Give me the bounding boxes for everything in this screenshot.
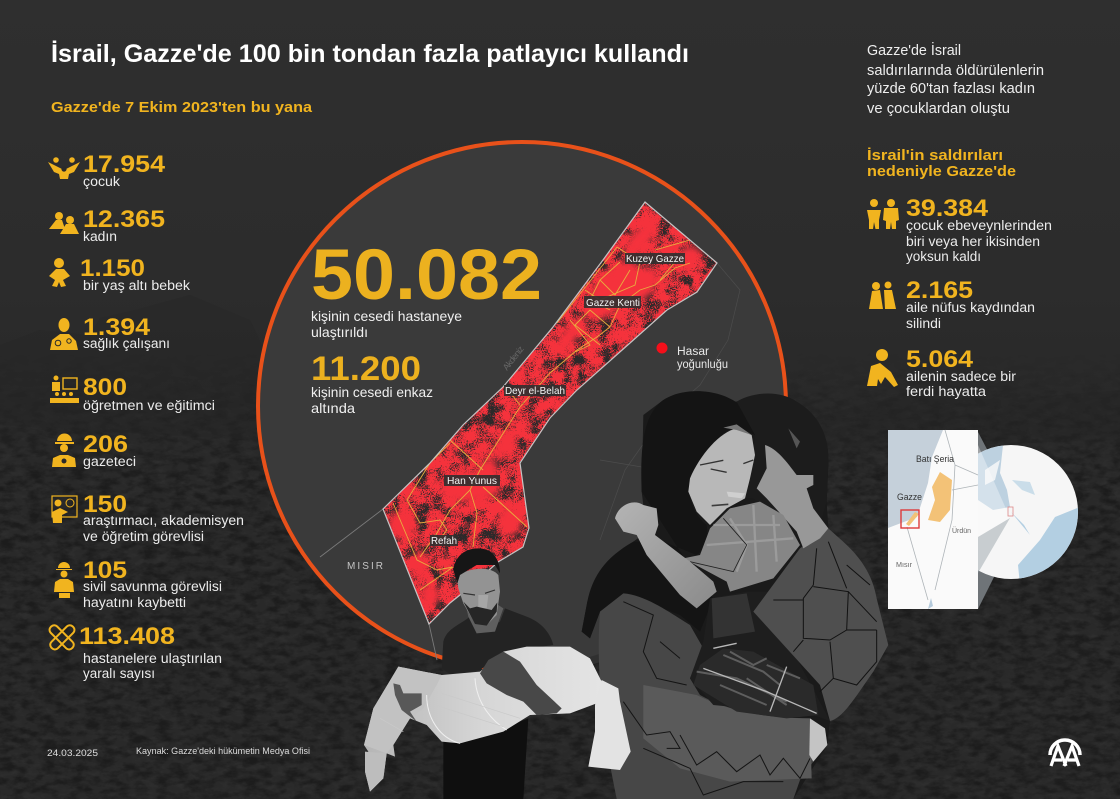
stat: health workers: sağlık çalışanı (83, 336, 170, 351)
border lines outside the strip (320, 509, 437, 660)
map labels: MISIR (347, 561, 383, 572)
text block: women and children share: ve çocuklardan oluştu (867, 101, 1010, 117)
panel: right family stats (867, 195, 1052, 399)
headline number: 50.082: ulaştırıldı (311, 324, 368, 340)
stat: women: 12.365 (83, 206, 165, 233)
roads (393, 240, 690, 590)
ribbon (588, 680, 631, 770)
map labels: Deyr el-Belah (505, 385, 565, 397)
stat: orphaned children: çocuk ebeveynlerinden (906, 218, 1052, 233)
child hair (737, 394, 829, 525)
stat: orphaned children: biri veya her ikisinden (906, 234, 1040, 249)
stat: teachers: 800 (83, 374, 127, 401)
stat: academics: 150 (83, 491, 127, 518)
stat: children: çocuk (83, 174, 120, 189)
silhouette base (582, 400, 888, 799)
text block: women and children share: yüzde 60'tan fazlası kadın (867, 81, 1035, 97)
stat: sole survivor: ailenin sadece bir (906, 369, 1017, 384)
stat: academics (52, 491, 244, 544)
stat: infants: bir yaş altı bebek (83, 278, 190, 293)
map: Gaza Strip damage density (380, 200, 720, 625)
jacket body (599, 593, 827, 799)
beard (463, 602, 497, 626)
text block: women and children share: saldırılarında öldürülenlerin (867, 63, 1044, 79)
stat: children: 17.954 (83, 151, 165, 178)
panel: left casualty stats (48, 151, 244, 681)
map labels: Refah (431, 535, 457, 547)
stat: infants (49, 255, 190, 293)
panel: map circle (258, 142, 786, 670)
stat: women: kadın (83, 229, 117, 244)
scarf and shoulder (582, 391, 755, 638)
stat: wounded: hastanelere ulaştırılan (83, 651, 222, 666)
forearm sleeve (643, 685, 812, 782)
neck (465, 602, 503, 633)
locator: inset map: Batı Şeria (916, 454, 955, 465)
legend: damage density (656, 342, 728, 371)
headline number: 11.200: kişinin cesedi enkaz (311, 384, 433, 400)
date: 24.03.2025 (47, 748, 98, 759)
stat: erased families: 2.165 (906, 277, 973, 304)
photo: man carrying shrouded child (364, 548, 631, 799)
child's plaid trousers (693, 643, 818, 718)
stat: orphaned children: 39.384 (906, 195, 988, 222)
stat: health workers: 1.394 (83, 314, 150, 341)
stat: orphaned children (867, 195, 1052, 264)
stat: civil defence: hayatını kaybetti (83, 595, 186, 610)
locator: inset map (888, 430, 978, 609)
title: İsrail, Gazze'de 100 bin tondan fazla patlayıcı kullandı (51, 40, 689, 68)
right sleeve (753, 528, 888, 721)
map labels: Han Yunus (447, 475, 497, 487)
faint surrounding roads and borders (600, 263, 740, 540)
headline number: 50.082: 50.082 (311, 236, 542, 315)
stat: academics: araştırmacı, akademisyen (83, 513, 244, 528)
trousers (443, 718, 528, 799)
heading: due to Israeli attacks (867, 147, 1016, 180)
stat: wounded: 113.408 (79, 623, 175, 650)
child's shirt (683, 502, 800, 592)
stat: infants: 1.150 (80, 255, 145, 282)
background: rubble photo (0, 429, 1120, 799)
stat: teachers (50, 374, 215, 413)
child's arm (615, 502, 717, 608)
stat: orphaned children: yoksun kaldı (906, 249, 981, 264)
stat: wounded (48, 623, 222, 681)
map labels: Gazze Kenti (586, 297, 640, 309)
headline number: 11.200 (311, 350, 433, 416)
stat: journalists: gazeteci (83, 454, 136, 469)
stat: civil defence: 105 (83, 557, 127, 584)
map labels (347, 253, 685, 572)
t-shirt (442, 608, 553, 677)
stat: civil defence (54, 557, 222, 610)
photo: mother holding child (582, 391, 888, 799)
hair (453, 548, 500, 583)
heading: due to Israeli attacks: nedeniyle Gazze'de (867, 163, 1016, 180)
legend: damage density: Hasar (677, 346, 709, 358)
face (457, 569, 500, 625)
stat: sole survivor: ferdi hayatta (906, 384, 987, 399)
stat: health workers (50, 314, 170, 351)
mother's face (688, 428, 755, 525)
stat: teachers: öğretmen ve eğitimci (83, 398, 215, 413)
stat: children (48, 151, 165, 189)
stat: wounded: yaralı sayısı (83, 666, 155, 681)
left hand (393, 683, 422, 722)
text block: women and children share (867, 41, 1044, 117)
right arm (480, 652, 562, 715)
stat: journalists: 206 (83, 431, 128, 458)
stat: civil defence: sivil savunma görevlisi (83, 579, 222, 594)
jacket pattern (623, 602, 810, 795)
map labels: Kuzey Gazze (626, 253, 684, 265)
stat: erased families: aile nüfus kaydından (906, 300, 1035, 315)
stat: erased families: silindi (906, 316, 941, 331)
stat: women (49, 206, 165, 244)
map labels: Akdeniz (501, 344, 526, 372)
locator: inset map: Ürdün (952, 527, 971, 535)
source: Kaynak: Gazze'deki hükümetin Medya Ofisi (136, 746, 310, 757)
locator: inset map: Gazze (897, 492, 922, 503)
stat: academics: ve öğretim görevlisi (83, 529, 204, 544)
patch hiding the ring between the two figures (584, 656, 606, 663)
headline number: 50.082: kişinin cesedi hastaneye (311, 308, 462, 324)
stat: erased families (869, 277, 1035, 331)
logo: AA (1050, 740, 1080, 766)
locator: inset map: Mısır (896, 562, 913, 569)
locator: globe (978, 432, 1078, 609)
stat: sole survivor (867, 346, 1017, 399)
legend: damage density: yoğunluğu (677, 359, 728, 371)
stat: journalists (52, 431, 136, 469)
shroud (364, 647, 602, 792)
mother's hand (757, 445, 828, 548)
heading: due to Israeli attacks: İsrail'in saldırıları (867, 147, 1003, 164)
headline number: 11.200: altında (311, 400, 355, 416)
child's torso (690, 592, 830, 721)
text block: women and children share: Gazze'de İsrail (867, 41, 961, 59)
subtitle: since 7 October: Gazze'de 7 Ekim 2023'ten bu yana (51, 99, 313, 116)
headline number: 11.200: 11.200 (311, 350, 421, 388)
stat: sole survivor: 5.064 (906, 346, 973, 373)
